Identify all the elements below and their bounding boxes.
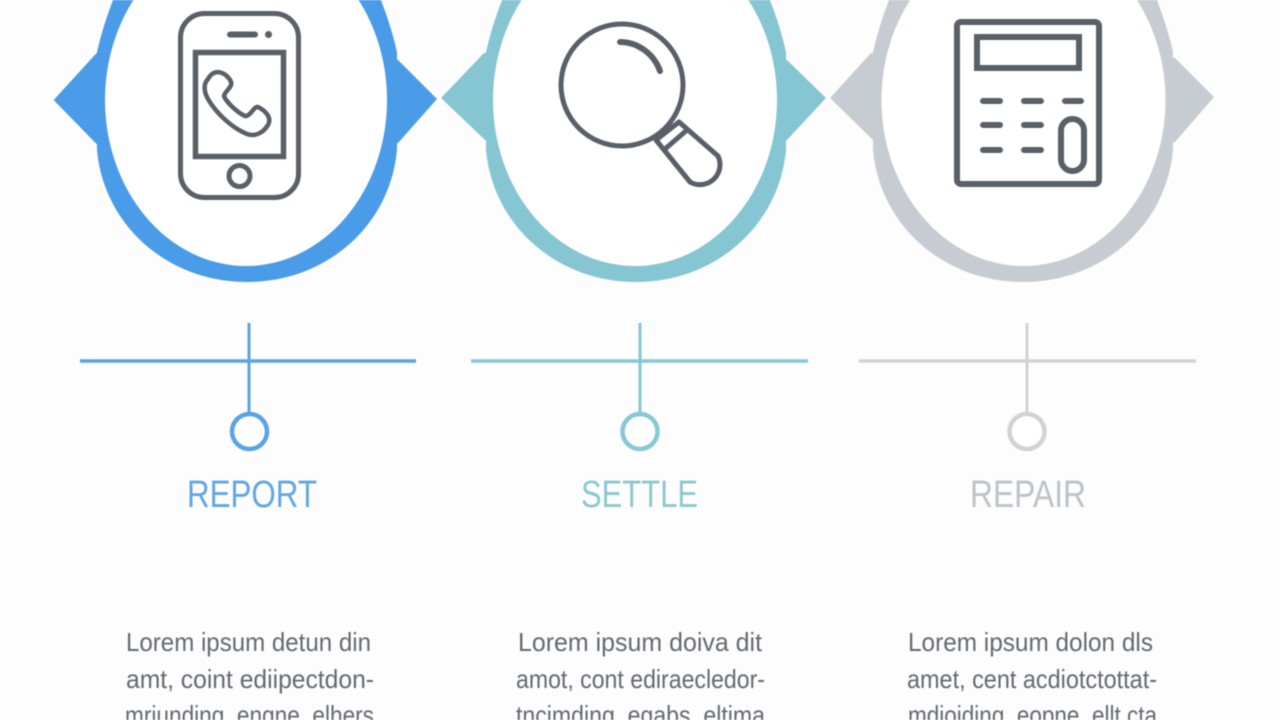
heading: repair: REPAIR (970, 474, 1086, 516)
icon: smartphone with handset (180, 14, 298, 198)
connector: report (80, 323, 416, 449)
heading: report: REPORT (187, 474, 317, 516)
text block: repair: Lorem ipsum dolon dls (908, 627, 1153, 657)
text block: report (125, 627, 374, 720)
ring with side arrows: repair (830, 0, 1214, 282)
ring with side arrows: report (55, 0, 437, 282)
panel: repair step (830, 0, 1214, 720)
text block: repair (907, 627, 1157, 720)
icon: calculator (957, 22, 1099, 184)
panel: report step (55, 0, 437, 720)
panel: settle step (441, 0, 826, 720)
ring with side arrows: settle (441, 0, 826, 282)
connector: settle (471, 323, 808, 449)
text block: settle: amot, cont ediraecledor- (516, 664, 765, 694)
text block: settle (516, 627, 765, 720)
heading: settle: SETTLE (581, 474, 698, 516)
text block: repair: amet, cent acdiotctottat- (907, 664, 1157, 694)
text block: settle: Lorem ipsum doiva dit (518, 627, 763, 657)
text block: report: amt, coint ediipectdon- (126, 664, 374, 694)
text block: report: Lorem ipsum detun din (126, 627, 371, 657)
connector: repair (859, 323, 1196, 449)
icon: magnifying glass (561, 24, 720, 185)
